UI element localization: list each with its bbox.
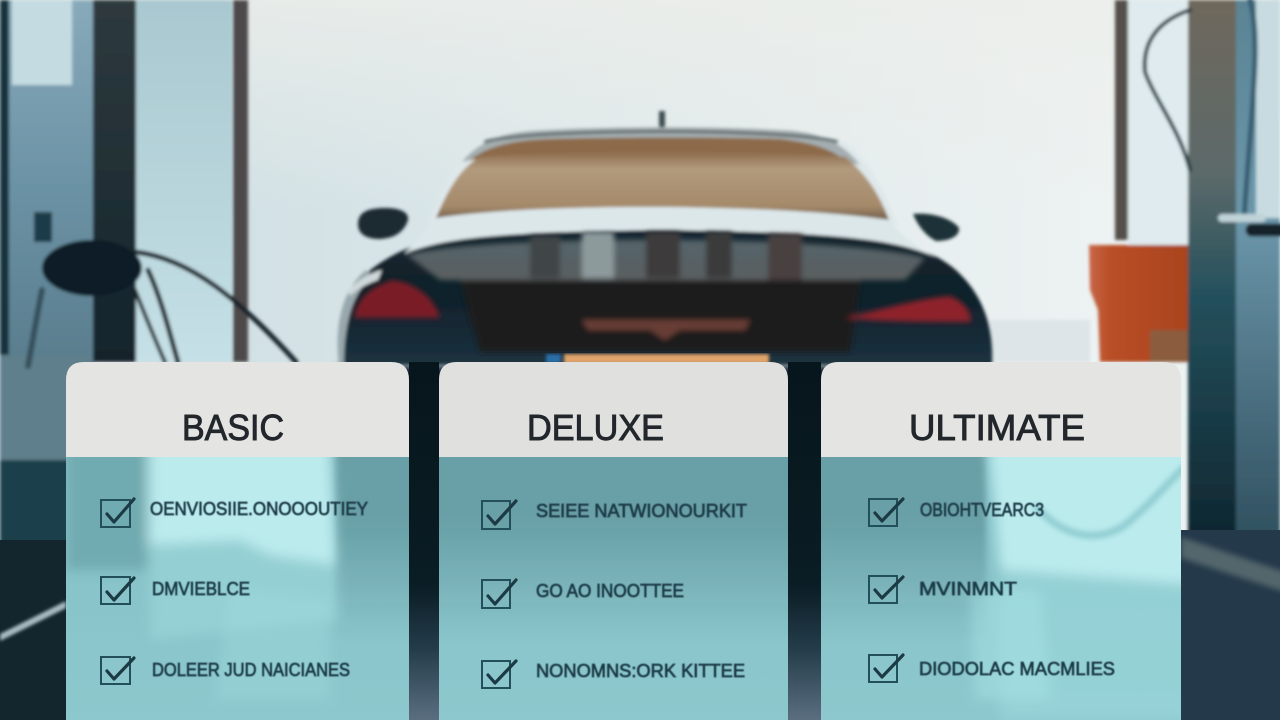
basic item 1: OENVIOSIIE.ONOOOUTIEY — [150, 499, 368, 519]
dark floor right — [1181, 530, 1280, 720]
basic header — [66, 362, 409, 457]
trunk lid highlight — [404, 207, 937, 258]
basic body — [66, 457, 409, 720]
car body — [338, 220, 992, 365]
panel: basic — [66, 362, 409, 720]
panel: ultimate — [821, 362, 1181, 720]
mirror left — [358, 208, 408, 239]
panel: deluxe — [439, 362, 788, 720]
antenna — [659, 111, 665, 129]
deluxe item 2 — [482, 580, 684, 608]
dark gap between deluxe and ultimate — [788, 362, 821, 720]
basic item 2 — [101, 577, 250, 604]
mirror right — [913, 214, 959, 241]
basic item 2: DMVIEBLCE — [152, 579, 250, 599]
ultimate item 2 — [869, 576, 1017, 603]
left thin pole — [233, 0, 248, 362]
taillight left — [354, 280, 440, 318]
deluxe item 1 — [482, 501, 747, 529]
ultimate header — [821, 362, 1181, 457]
deluxe item 3 — [482, 661, 745, 688]
horizon haze — [990, 320, 1090, 362]
deluxe item 1: SEIEE NATWIONOURKIT — [536, 501, 747, 521]
right hoses — [1145, 0, 1280, 230]
rear window — [436, 152, 889, 220]
deluxe item 2: GO AO INOOTTEE — [536, 581, 684, 601]
orange bucket — [1089, 245, 1190, 362]
lower trunk panel — [460, 280, 860, 352]
car lower body fading into floor — [334, 366, 986, 640]
basic title: BASIC — [182, 407, 284, 448]
taillight right — [846, 296, 971, 322]
basic item 3 — [101, 657, 350, 684]
right wall — [1235, 0, 1280, 540]
trunk reflection — [407, 240, 925, 280]
license plate — [546, 354, 769, 364]
car roof — [428, 128, 898, 240]
left glass panel — [135, 0, 232, 362]
rear badge — [582, 320, 750, 340]
dark gap between basic and deluxe — [409, 362, 439, 720]
dark floor left — [0, 540, 66, 720]
ultimate item 2: MVINMNT — [919, 579, 1017, 599]
left building wall — [0, 0, 95, 550]
ultimate item 3 — [869, 655, 1115, 682]
light patches beneath glass panels — [66, 440, 1200, 720]
car — [338, 111, 992, 365]
ultimate item 1 — [869, 499, 1044, 526]
ultimate item 3: DIODOLAC MACMLIES — [919, 659, 1115, 679]
right dark pillar — [1188, 0, 1236, 540]
left dark pillar — [93, 0, 136, 362]
basic item 3: DOLEER JUD NAICIANES — [152, 660, 350, 680]
basic item 1 — [101, 499, 368, 527]
ultimate title: ULTIMATE — [909, 407, 1085, 448]
floor — [0, 400, 1280, 720]
right glass and pole — [1115, 0, 1190, 245]
hose reflection — [1035, 462, 1190, 535]
deluxe item 3: NONOMNS:ORK KITTEE — [536, 661, 745, 681]
ultimate body — [821, 457, 1181, 720]
ultimate item 1: OBIOHTVEARC3 — [920, 500, 1044, 520]
deluxe title: DELUXE — [527, 407, 664, 448]
hose cluster left — [28, 212, 296, 366]
deluxe header — [439, 362, 788, 457]
deluxe body — [439, 457, 788, 720]
